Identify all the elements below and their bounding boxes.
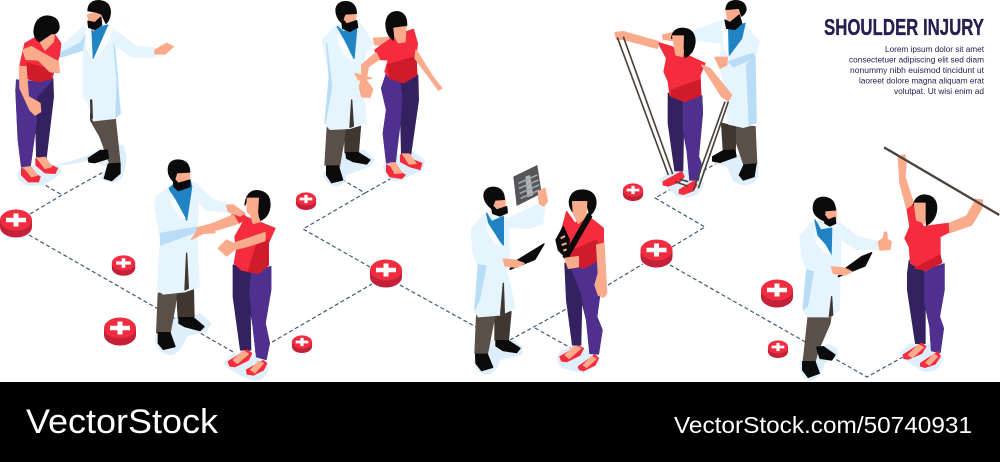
woman <box>556 190 607 371</box>
woman <box>16 16 61 182</box>
medal 5 <box>370 260 402 288</box>
tablet <box>510 244 544 269</box>
medal 1 <box>0 210 32 238</box>
description text: laoreet dolore magna aliquam erat <box>859 76 985 86</box>
medal 3 <box>104 318 136 346</box>
description text: volutpat. Ut wisi enim ad <box>894 86 984 96</box>
footer logo: VectorStock <box>26 403 219 441</box>
medal 4 <box>296 192 316 210</box>
woman <box>192 191 275 375</box>
resistance bands <box>617 37 728 190</box>
scene 1: doctor examines bent-over woman <box>16 1 173 186</box>
doctor <box>155 160 227 349</box>
medal 6 <box>292 335 312 353</box>
scene 6: overhead stick exercise with doctor's thumbs-up <box>799 147 999 381</box>
medal 7 <box>623 183 643 201</box>
dashed connector path <box>29 163 903 377</box>
floor shadows <box>155 313 268 381</box>
medal 10 <box>768 340 788 358</box>
description text: consectetuer adipiscing elit sed diam <box>849 54 984 64</box>
exercise stick <box>884 147 999 215</box>
doctor <box>800 197 891 377</box>
footer url: VectorStock.com/50740931 <box>674 412 972 438</box>
medal 8 <box>640 240 672 268</box>
medal 9 <box>761 280 793 308</box>
tablet <box>838 253 872 277</box>
scene 5: resistance band exercise with doctor <box>615 1 759 197</box>
floor shadows <box>799 343 943 381</box>
title block <box>824 14 985 96</box>
floor shadow <box>17 145 126 186</box>
doctor <box>323 2 393 183</box>
doctor <box>60 1 173 181</box>
floor shadows <box>473 340 600 375</box>
woman <box>359 12 442 178</box>
medal 2 <box>112 255 135 276</box>
scene 2: doctor checks arm mobility <box>155 160 275 381</box>
description text <box>849 44 985 96</box>
x-ray film <box>513 165 542 206</box>
floor shadows <box>323 150 425 187</box>
scene 4: doctor shows x-ray to woman in a sling <box>471 165 607 375</box>
description text: nonummy nibh euismod tincidunt ut <box>850 65 985 75</box>
doctor <box>663 1 759 180</box>
floor shadows <box>659 148 758 197</box>
footer bar <box>0 382 1000 462</box>
woman <box>615 28 732 194</box>
description text: Lorem ipsum dolor sit amet <box>885 44 985 54</box>
scene 3: doctor supports woman's arm <box>323 2 442 187</box>
woman <box>898 155 983 367</box>
doctor <box>471 165 547 371</box>
thumbs-up hand <box>878 232 891 250</box>
